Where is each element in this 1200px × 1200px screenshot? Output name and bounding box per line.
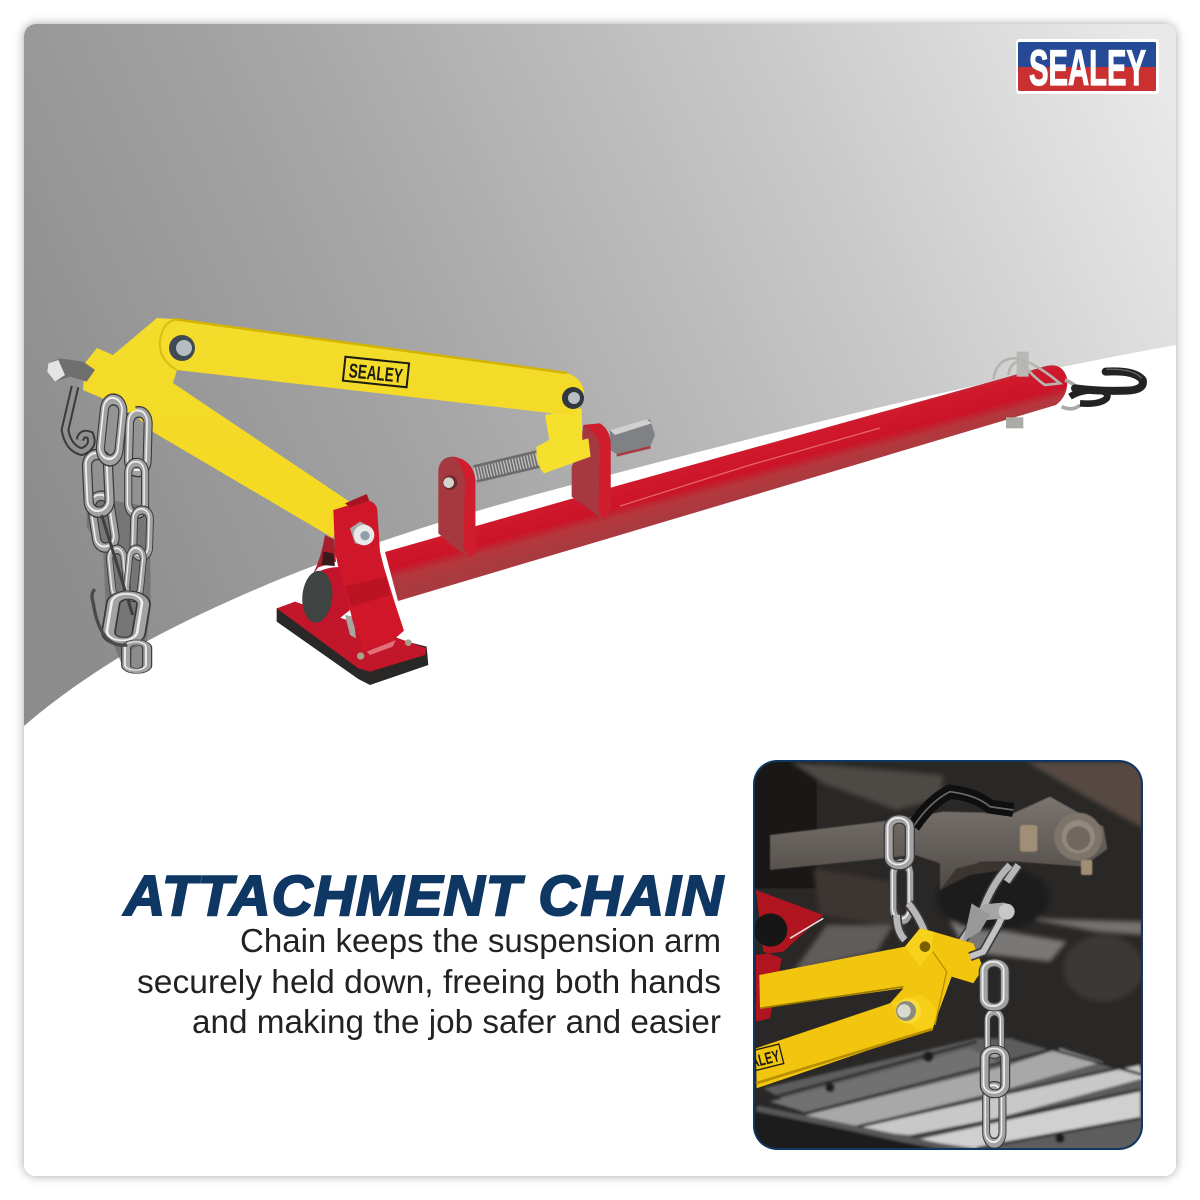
red jack part (754, 890, 823, 1022)
text block: description: and making the job safer and easier (192, 1003, 721, 1040)
arm label: ALEY (749, 1046, 782, 1072)
product: red base mount (277, 494, 428, 685)
product: threaded spindle and brackets (438, 408, 655, 558)
shackle and hanging chain (963, 902, 1015, 1143)
arm label (755, 1043, 784, 1072)
sealey label on arm (343, 357, 409, 388)
logo: Sealey (1016, 39, 1159, 96)
text block: description: securely held down, freeing both hands (137, 963, 721, 1000)
bolt: arm pivot (169, 335, 195, 361)
scene background blur (790, 762, 1143, 1002)
text block: description (137, 922, 721, 1040)
yellow lifting arm in photo (745, 928, 983, 1088)
photo: chain attached to suspension arm (745, 755, 1150, 1155)
product: red lever tube (385, 365, 1067, 601)
chain far links (888, 792, 1018, 950)
title: ATTACHMENT CHAIN (122, 864, 725, 928)
text block: description: Chain keeps the suspension arm (240, 922, 721, 959)
product: yellow lever arm with Sealey label (83, 318, 584, 538)
bolt: arm end (562, 387, 584, 409)
product: pin and hook at tube end (993, 352, 1143, 428)
floor grid (750, 1038, 1143, 1152)
suspension arm (770, 797, 1107, 890)
sealey label on arm: SEALEY (348, 360, 404, 388)
product: chain and shackle (47, 358, 151, 671)
